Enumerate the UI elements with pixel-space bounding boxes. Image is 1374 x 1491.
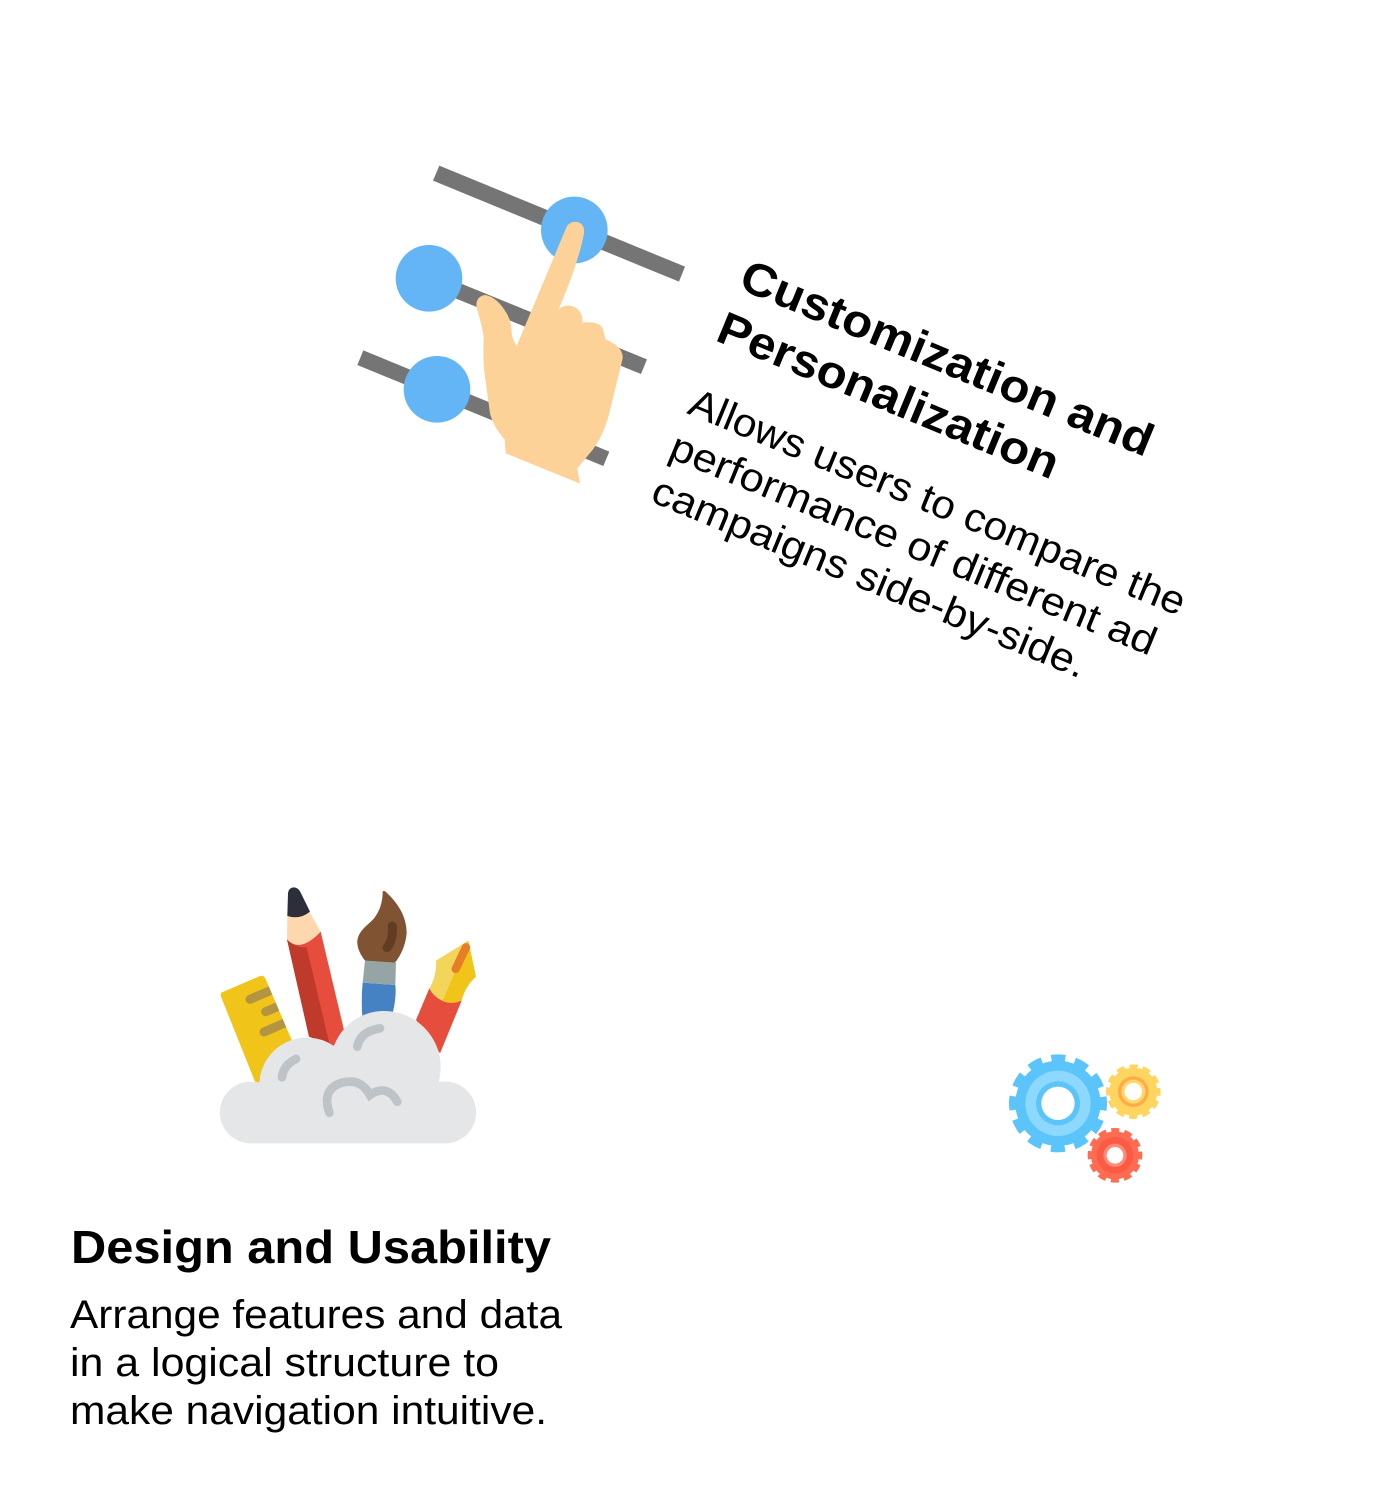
- icon: art tools in cloud: [220, 887, 476, 1143]
- text block: customization description: Allows users to compare the: [683, 381, 1192, 624]
- text block: customization description: [646, 381, 1192, 687]
- red gear: [1090, 1130, 1140, 1180]
- text block: customization description: campaigns side-by-side.: [646, 469, 1093, 687]
- heading: customization: Personalization: [710, 301, 1067, 489]
- pointing hand: [476, 222, 623, 484]
- icon: gears: [1013, 1058, 1158, 1180]
- text block: design description: in a logical structure to: [70, 1341, 499, 1385]
- text block: design description: [70, 1293, 563, 1433]
- slider knobs: [396, 197, 608, 423]
- fountain pen: [416, 941, 476, 1053]
- ruler: [221, 976, 292, 1083]
- icon: hand on sliders: [357, 166, 685, 484]
- paint brush: [357, 891, 407, 1017]
- yellow gear: [1108, 1067, 1158, 1117]
- slider bars: [357, 166, 685, 466]
- text block: customization description: performance of different ad: [664, 425, 1163, 664]
- heading: design and usability: Design and Usability: [71, 1221, 551, 1273]
- text block: design description: Arrange features and data: [70, 1293, 563, 1337]
- large blue gear: [1013, 1058, 1103, 1149]
- pencil: [287, 887, 344, 1047]
- text block: design description: make navigation intuitive.: [70, 1389, 547, 1433]
- cloud: [220, 1011, 476, 1143]
- heading: customization: Customization and: [733, 249, 1161, 466]
